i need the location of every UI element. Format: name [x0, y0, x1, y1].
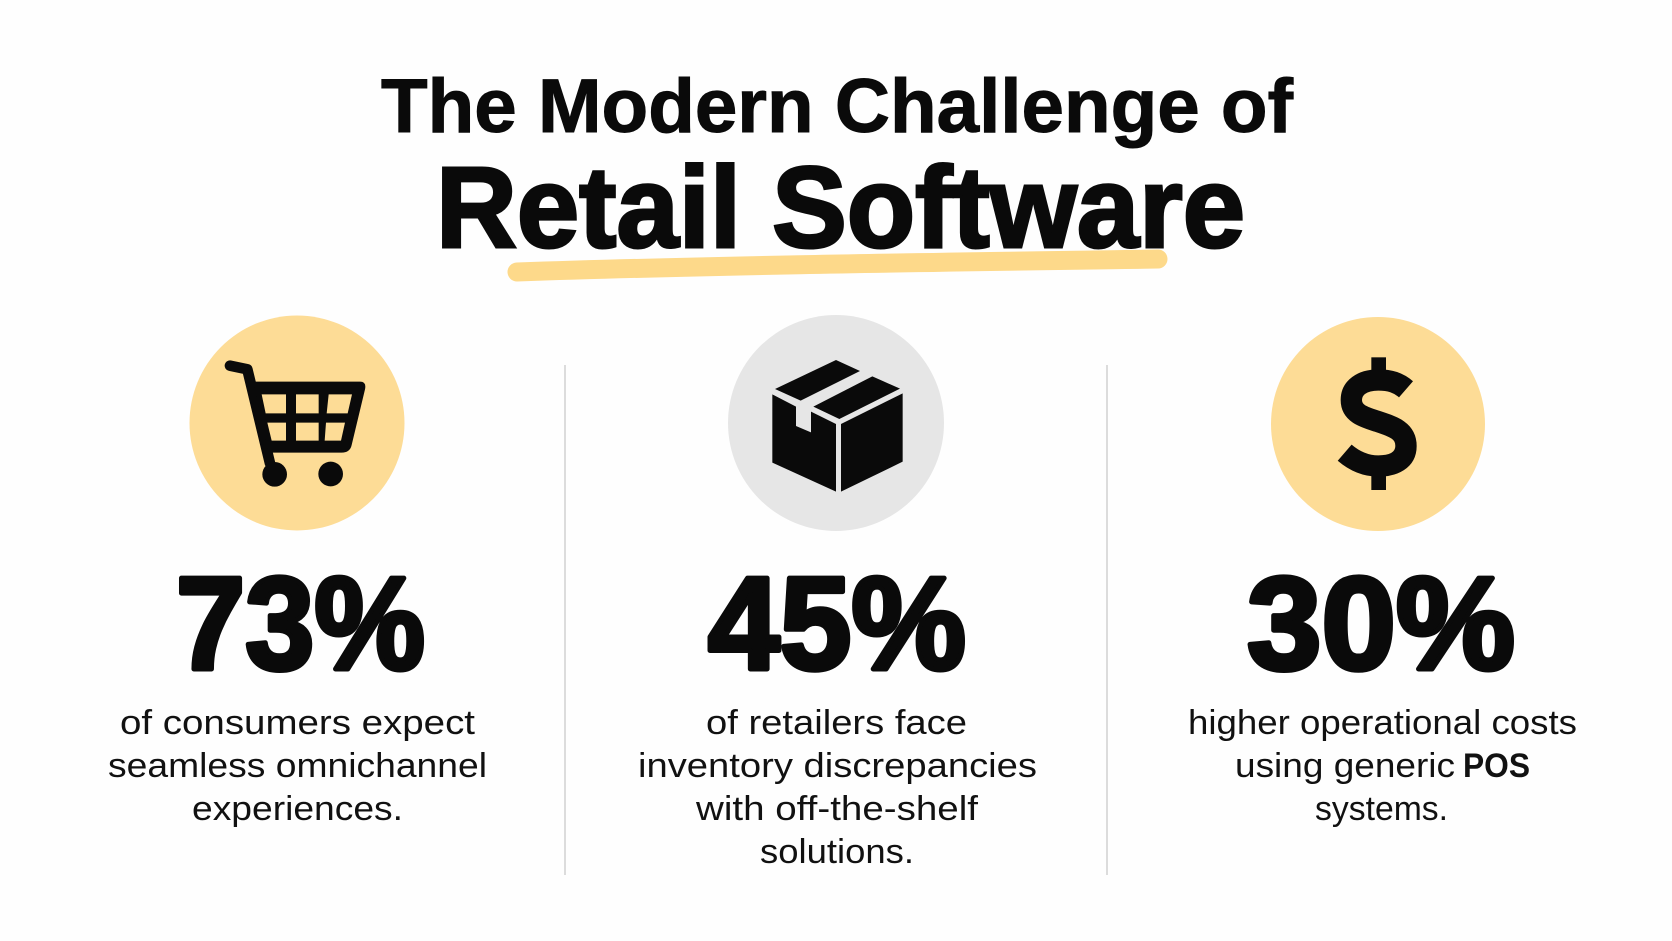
description: inventory: solutions.: [760, 833, 914, 871]
description: inventory: inventory discrepancies: [638, 747, 1037, 785]
description: inventory: [638, 704, 1037, 871]
description: costs: higher operational costs: [1188, 704, 1577, 742]
description: costs: using generic: [1235, 747, 1455, 785]
panel: omnichannel: [108, 316, 487, 828]
description: omnichannel: experiences.: [192, 790, 403, 828]
description: costs: systems.: [1315, 790, 1448, 828]
description: inventory: of retailers face: [706, 704, 967, 742]
description: costs: POS: [1463, 747, 1530, 785]
panel: costs: [1188, 317, 1577, 828]
description: inventory: with off-the-shelf: [695, 790, 979, 828]
title line 1: The Modern Challenge of: [381, 64, 1294, 149]
description: omnichannel: seamless omnichannel: [108, 747, 487, 785]
yellow underline: [517, 259, 1158, 272]
icon: shopping cart: [190, 316, 404, 530]
description: omnichannel: [108, 704, 487, 828]
icon: cardboard box: [728, 315, 944, 531]
description: omnichannel: of consumers expect: [120, 704, 476, 742]
title line 2: Retail Software: [436, 144, 1245, 272]
panel: inventory: [638, 315, 1037, 871]
stat: 45%: 45%: [708, 550, 966, 697]
title: [381, 64, 1294, 272]
stat: 30%: 30%: [1247, 550, 1515, 697]
stat: 73%: 73%: [176, 550, 425, 697]
icon: dollar sign: [1271, 317, 1485, 531]
description: costs: [1188, 704, 1577, 828]
